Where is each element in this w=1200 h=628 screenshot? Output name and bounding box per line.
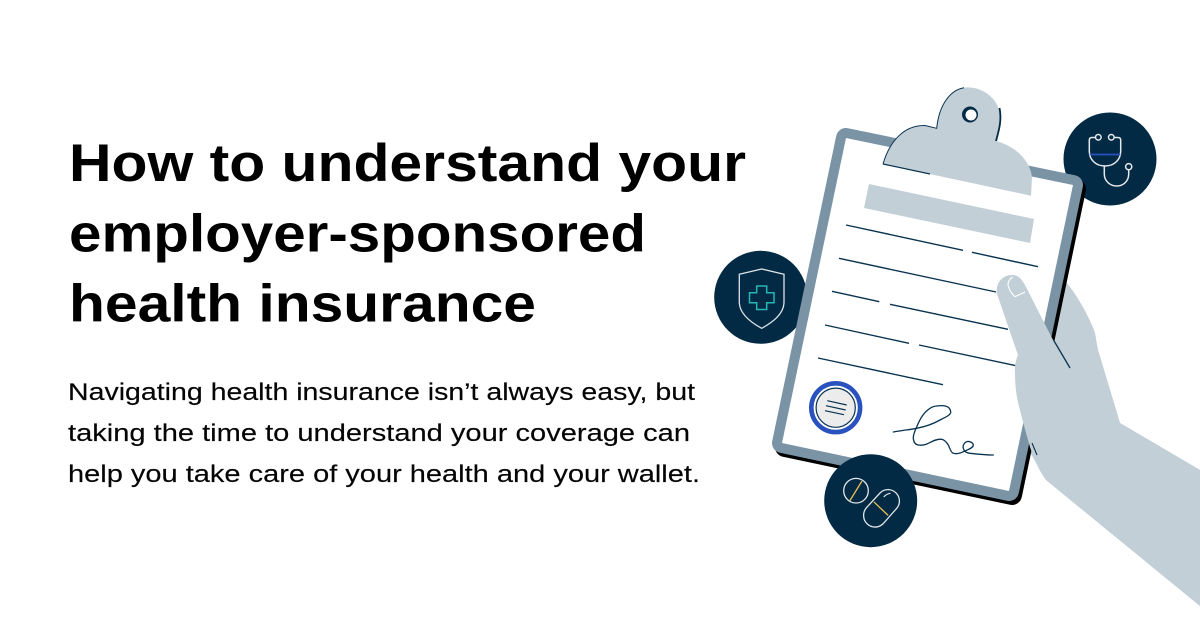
paper header bar [864, 184, 1034, 243]
intro text block: help you take care of your health and your wallet. [68, 461, 700, 488]
intro text block [68, 379, 700, 488]
hand: back of palm behind clipboard [1000, 283, 1200, 606]
clipboard board [782, 138, 1073, 491]
signature [893, 406, 993, 455]
icon: stethoscope badge [1064, 112, 1156, 206]
title: health insurance [69, 274, 536, 334]
seal [811, 383, 860, 432]
title: employer-sponsored [69, 204, 646, 264]
title [69, 134, 746, 334]
intro text block: Navigating health insurance isn’t always easy, but [68, 379, 695, 406]
paper text lines [818, 225, 1038, 385]
paper sheet [782, 138, 1073, 491]
clipboard shadow [785, 142, 1076, 495]
intro text block: taking the time to understand your coverage can [68, 420, 690, 447]
title: How to understand your [69, 134, 746, 193]
clipboard [782, 87, 1076, 495]
clip [883, 87, 1032, 196]
icon: pills badge [824, 454, 917, 547]
icon: shield with cross badge [714, 251, 807, 344]
hand: thumb and palm in front of clipboard [997, 275, 1200, 606]
